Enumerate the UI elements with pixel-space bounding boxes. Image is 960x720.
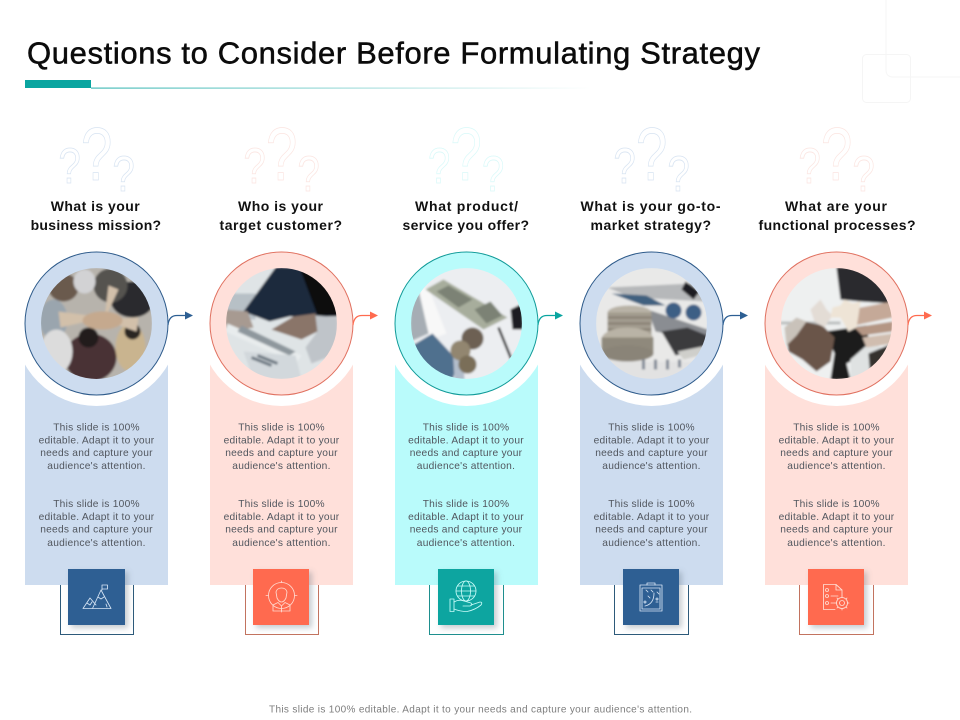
question marks: ?: [81, 113, 112, 197]
text panel background: [25, 350, 168, 585]
panel: target customer: [199, 113, 378, 634]
body text: audience's attention.: [47, 538, 146, 549]
body text: This slide is 100%: [53, 499, 140, 510]
question marks: ?: [428, 138, 450, 194]
body text: audience's attention.: [787, 538, 886, 549]
body text: This slide is 100%: [608, 499, 695, 510]
body text: This slide is 100%: [423, 422, 509, 434]
arrow: [353, 312, 378, 325]
title: Questions to Consider Before Formulating Strategy: [27, 36, 760, 70]
arrow: [168, 312, 193, 325]
body text: This slide is 100%: [793, 499, 880, 510]
question marks: ?: [798, 138, 821, 194]
body text: [39, 422, 155, 549]
heading: [580, 198, 721, 233]
body text: editable. Adapt it to your: [594, 512, 710, 523]
photo: businessman with tablet: [226, 268, 338, 380]
body text: [224, 422, 340, 549]
question marks: ?: [668, 146, 690, 202]
photo: puzzle pieces in hands: [780, 268, 892, 380]
text panel background: [395, 350, 538, 585]
question marks: ?: [244, 138, 266, 194]
body text: needs and capture your: [410, 525, 523, 536]
body text: needs and capture your: [595, 525, 708, 536]
heading: [31, 198, 161, 233]
text panel background: [210, 350, 353, 585]
body text: audience's attention.: [417, 461, 515, 472]
body text: editable. Adapt it to your: [594, 436, 710, 446]
icon: globe in hand: [438, 569, 494, 625]
icon frame: [430, 585, 504, 634]
panel: go-to-market strategy: [569, 113, 748, 634]
photo ring: [754, 241, 919, 406]
arrow: [723, 312, 748, 325]
body text: audience's attention.: [602, 538, 701, 549]
body text: This slide is 100%: [608, 422, 695, 434]
heading: What are your: [785, 198, 888, 214]
question marks: [58, 113, 135, 202]
question marks: ?: [298, 146, 320, 202]
body text: audience's attention.: [602, 461, 701, 472]
question marks: ?: [636, 113, 667, 197]
heading: market strategy?: [590, 217, 711, 233]
body text: audience's attention.: [787, 461, 886, 472]
question marks: ?: [614, 138, 636, 194]
icon frame: [60, 585, 134, 634]
question marks: [614, 113, 690, 202]
text panel background: [765, 350, 908, 585]
photo ring: [384, 241, 549, 406]
question marks: [798, 113, 875, 202]
body text: [408, 422, 524, 549]
panel: product or service: [384, 113, 563, 634]
footer note: This slide is 100% editable. Adapt it to your needs and capture your audience's attention.: [269, 704, 692, 716]
heading: functional processes?: [758, 217, 916, 233]
body text: This slide is 100%: [793, 422, 880, 434]
body text: [594, 422, 710, 549]
body text: This slide is 100%: [238, 422, 325, 434]
body text: editable. Adapt it to your: [779, 436, 895, 446]
body text: editable. Adapt it to your: [224, 436, 340, 446]
heading: [402, 198, 529, 233]
heading: Who is your: [238, 198, 324, 214]
icon frame: [246, 585, 318, 634]
question marks: ?: [482, 146, 504, 202]
body text: needs and capture your: [225, 448, 338, 459]
heading: business mission?: [31, 217, 161, 233]
body text: audience's attention.: [47, 461, 146, 472]
body text: editable. Adapt it to your: [408, 512, 524, 523]
panel: business mission: [14, 113, 193, 634]
heading: What is your go-to-: [580, 198, 721, 214]
icon: strategy clipboard: [623, 569, 679, 625]
question marks: ?: [450, 113, 482, 197]
heading: What product/: [415, 198, 518, 214]
heading: What is your: [51, 198, 140, 214]
body text: needs and capture your: [40, 448, 153, 459]
heading: target customer?: [220, 217, 342, 233]
text panel background: [580, 350, 723, 585]
heading: [758, 198, 916, 233]
body text: editable. Adapt it to your: [408, 436, 524, 446]
body text: editable. Adapt it to your: [779, 512, 895, 523]
body text: audience's attention.: [232, 461, 331, 472]
question marks: [244, 113, 320, 202]
body text: This slide is 100%: [53, 422, 140, 434]
icon: mountain with flag: [68, 569, 125, 625]
question marks: ?: [58, 138, 81, 194]
icon: target customer: [253, 569, 309, 625]
photo: coin stack and pens: [596, 268, 708, 380]
body text: This slide is 100%: [423, 499, 509, 510]
question marks: ?: [821, 113, 852, 197]
body text: needs and capture your: [780, 525, 893, 536]
heading: service you offer?: [402, 217, 529, 233]
panel: functional processes: [754, 113, 932, 634]
body text: [779, 422, 895, 549]
question marks: ?: [112, 146, 135, 202]
question marks: [428, 113, 504, 202]
photo ring: [14, 241, 179, 406]
body text: editable. Adapt it to your: [39, 512, 155, 523]
icon: process checklist with gear: [808, 569, 864, 625]
body text: editable. Adapt it to your: [224, 512, 340, 523]
question marks: ?: [266, 113, 297, 197]
body text: audience's attention.: [232, 538, 331, 549]
title underline accent: [25, 80, 591, 89]
icon frame: [800, 585, 874, 634]
icon frame: [614, 585, 688, 634]
body text: editable. Adapt it to your: [39, 436, 155, 446]
photo ring: [199, 241, 364, 406]
body text: needs and capture your: [410, 448, 523, 459]
photo: team hands together: [40, 268, 154, 382]
body text: needs and capture your: [595, 448, 708, 459]
body text: needs and capture your: [225, 525, 338, 536]
heading: [220, 198, 342, 233]
body text: needs and capture your: [40, 525, 153, 536]
arrow: [908, 312, 932, 325]
question marks: ?: [852, 146, 875, 202]
photo: dollars and coins: [410, 268, 522, 380]
body text: needs and capture your: [780, 448, 893, 459]
body text: audience's attention.: [417, 538, 515, 549]
body text: This slide is 100%: [238, 499, 325, 510]
photo ring: [569, 241, 734, 406]
arrow: [538, 312, 563, 325]
